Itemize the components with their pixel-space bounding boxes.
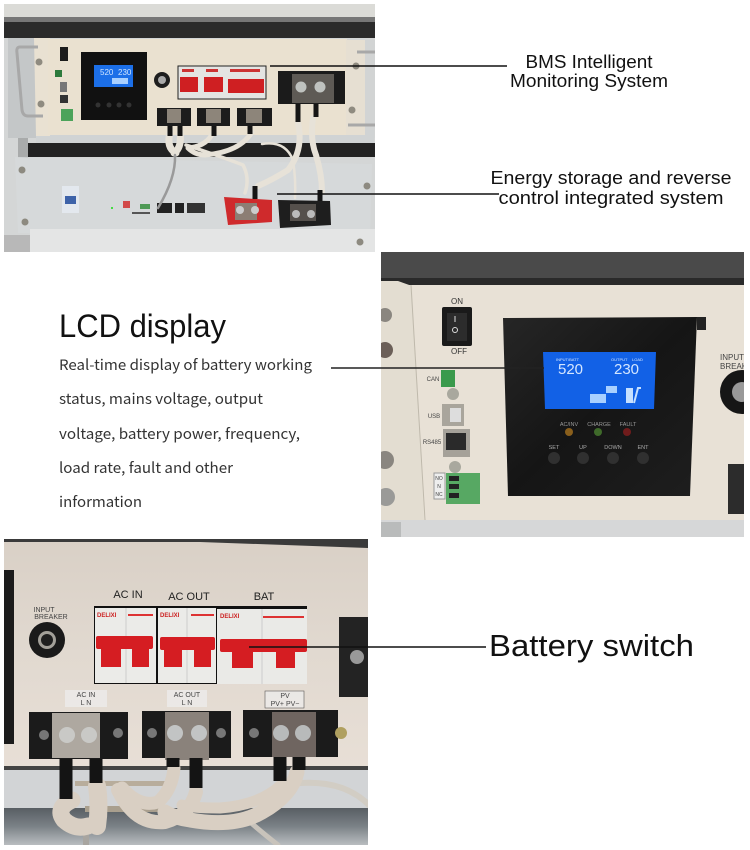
terminal labels: PV [280,693,290,700]
lower battery unit [4,157,375,252]
ports [423,370,480,504]
input breaker: INPUT [720,353,744,362]
text block: LCD description: load rate, fault and other [59,457,233,478]
ports: CAN [427,377,439,383]
label: Energy storage and reverse control integrated system: control integrated system [498,188,724,208]
photo: LCD panel [376,252,750,537]
power switch [442,297,472,356]
photo: breakers and terminals: AC OUT [168,591,210,603]
LCD bezel [503,317,697,496]
LCD screen: 230 [614,361,639,378]
breakers [94,606,307,684]
indicators and buttons: SET [549,445,560,451]
label: BMS Intelligent Monitoring System: Monitoring System [510,71,668,91]
BMS cream panel: 520 [100,68,114,77]
indicators and buttons: DOWN [604,445,622,451]
input breaker knob: BREAKER [34,614,68,621]
text block: LCD description: status, mains voltage, output [59,388,264,409]
leader line: BMS [270,65,507,67]
LCD screen: 520 [558,361,583,378]
input breaker [720,354,744,514]
LCD screen [543,352,656,409]
ports: NC [435,492,443,498]
text block: LCD description: Real-time display of battery working [59,354,312,375]
photo: breakers and terminals [4,539,370,845]
breakers: DELIXI [160,613,180,619]
photo: breakers and terminals: BAT [254,591,275,603]
terminal labels: AC OUT [174,692,201,699]
input breaker knob [29,607,68,658]
breakers: DELIXI [220,614,240,620]
leader line: battery switch [249,646,486,648]
terminal labels: PV+ PV− [271,701,299,708]
terminal blocks [29,710,347,760]
LCD screen: LOAD [632,357,643,362]
ports: RS485 [423,440,442,446]
indicators and buttons: AC/INV [560,422,578,428]
indicators and buttons: CHARGE [587,422,611,428]
text block: LCD description: voltage, battery power, frequency, [59,423,300,444]
ports: USB [428,414,440,420]
LCD screen: OUTPUT [611,357,628,362]
leader line: storage [277,193,499,195]
indicators and buttons [548,422,649,464]
breaker labels: AC IN [113,589,143,601]
leader line: LCD [331,367,544,369]
terminal labels: L N [81,700,91,707]
ports: N [437,484,441,490]
power switch: OFF [451,347,467,356]
breakers: DELIXI [97,613,117,619]
indicators and buttons: FAULT [620,422,637,428]
BMS cream panel: 230 [118,68,132,77]
ports: NO [435,476,443,482]
label: Energy storage and reverse control integrated system: Energy storage and reverse [490,168,732,188]
input breaker knob: INPUT [34,607,55,614]
terminal labels: AC IN [77,692,95,699]
LCD screen: INPUT/BATT [556,357,580,362]
text block: LCD description: information [59,491,142,512]
BMS cream panel [17,38,375,136]
label: Battery switch: Battery switch [489,628,694,663]
cables [61,757,370,845]
power switch: ON [451,297,463,306]
label: BMS Intelligent Monitoring System: BMS Intelligent [526,52,652,72]
photo: BMS and storage rack [4,4,375,252]
terminal labels [65,690,304,708]
cables [156,135,325,210]
input breaker: BREAK [720,362,748,371]
heading: LCD display: LCD display [59,308,226,344]
terminal labels: L N [182,700,192,707]
indicators and buttons: ENT [638,445,649,451]
indicators and buttons: UP [579,445,587,451]
